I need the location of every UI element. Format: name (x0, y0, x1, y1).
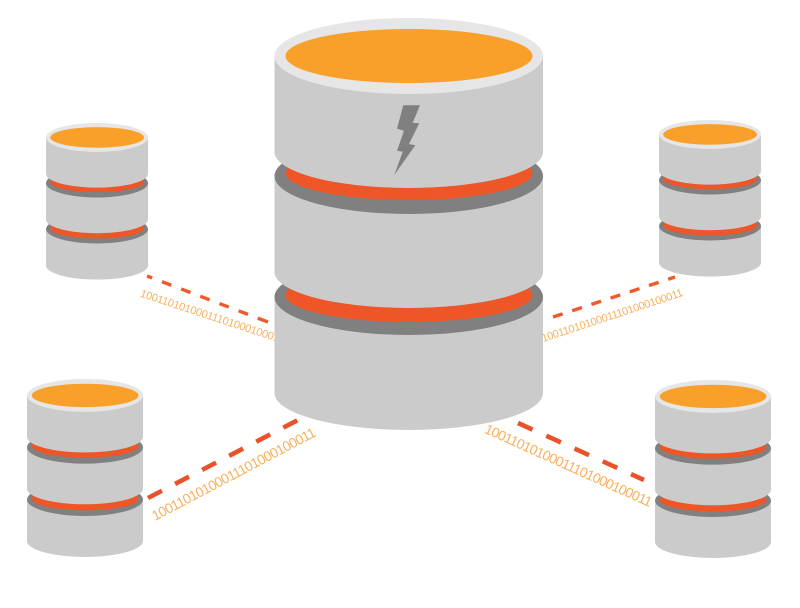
dashed arrow: bottom-left link (148, 420, 298, 498)
central database cylinder (274, 18, 543, 430)
binary label: top-right: 10011010100011101000100011 (540, 287, 685, 345)
upper red band (286, 146, 532, 200)
database: bottom-left (27, 379, 143, 557)
database: bottom-right (655, 380, 771, 558)
top rim (274, 18, 543, 94)
middle tier (274, 176, 543, 308)
upper ring (274, 138, 543, 214)
icon: lightning bolt (394, 105, 420, 175)
binary label: bottom-left: 10011010100011101000100011 (149, 424, 318, 524)
top tier (274, 56, 543, 188)
dashed arrow: top-left link (147, 276, 268, 322)
bottom tier (274, 297, 543, 430)
orange top surface (286, 29, 532, 83)
lower ring (274, 259, 543, 335)
binary label: top-left: 10011010100011101000100011 (139, 288, 286, 347)
database: top-left (46, 123, 148, 280)
dashed arrow: top-right link (553, 277, 675, 317)
database: top-right (659, 120, 761, 277)
binary label: bottom-right: 10011010100011101000100011 (482, 421, 655, 510)
dashed arrow: bottom-right link (518, 423, 644, 480)
lower red band (286, 268, 532, 322)
